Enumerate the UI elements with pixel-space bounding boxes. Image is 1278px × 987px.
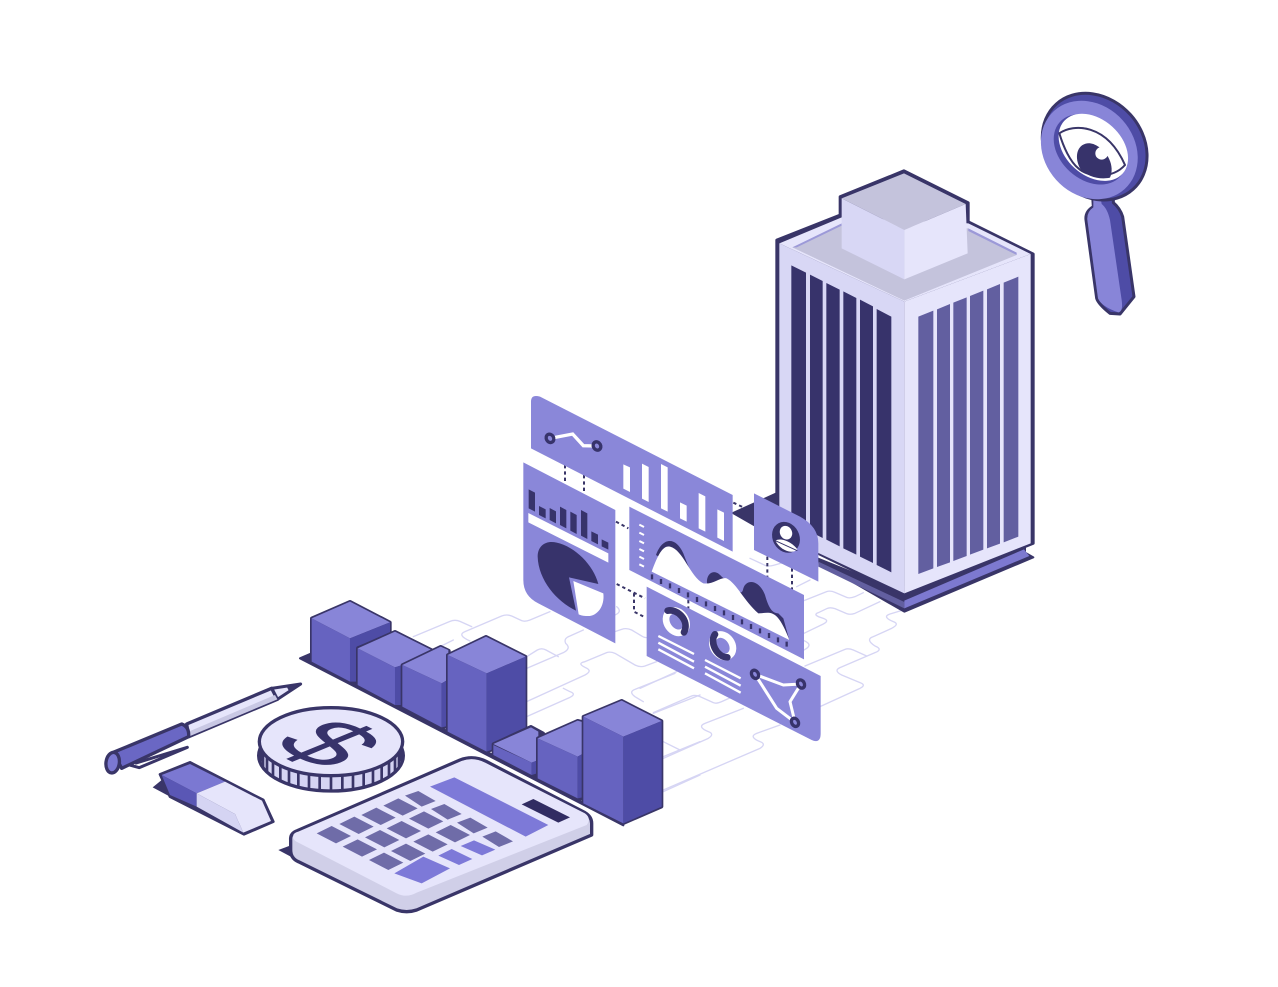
icon: user avatar — [767, 517, 805, 558]
network triangle — [750, 669, 806, 728]
data dashboard panels — [523, 396, 821, 741]
pen tip — [272, 684, 301, 699]
calculator shadow — [278, 845, 303, 863]
block 5 — [493, 727, 543, 775]
donut chart 1 — [662, 606, 691, 637]
building outline — [777, 171, 1033, 595]
building roof — [779, 217, 1031, 302]
building left wall — [779, 243, 904, 593]
block 3 — [402, 647, 449, 727]
calculator body — [291, 758, 592, 912]
panel: left stats and pie — [523, 462, 615, 643]
block 6 — [538, 721, 583, 798]
dollar sign: $ — [246, 707, 412, 780]
solar strip — [522, 799, 570, 823]
panel: profile card — [754, 493, 818, 582]
white strip — [528, 513, 608, 563]
bar chart: dark bars — [529, 489, 608, 550]
dollar coin — [246, 707, 412, 791]
block 4 — [448, 637, 526, 752]
pen — [105, 684, 301, 774]
background circuit lines — [393, 558, 903, 792]
calculator — [278, 758, 592, 912]
donut chart 2 — [708, 630, 737, 661]
panel: middle area chart — [629, 507, 804, 659]
pie chart — [538, 542, 604, 616]
bar blocks — [300, 602, 662, 825]
pen body — [187, 688, 277, 737]
dashed connectors — [565, 465, 792, 618]
building base — [733, 493, 1033, 612]
bar chart: white bars — [623, 464, 724, 541]
block 2 — [358, 632, 432, 705]
pen grip — [105, 724, 189, 774]
block 7 — [583, 701, 662, 823]
ground shadow — [300, 653, 623, 825]
calculator face — [293, 759, 589, 896]
block 1 — [312, 602, 390, 683]
building right wall — [904, 254, 1031, 593]
magnifier ring — [1021, 72, 1169, 221]
magnifier handle — [1086, 197, 1134, 314]
keypad — [317, 791, 513, 883]
coin edge — [259, 720, 403, 791]
area chart — [652, 541, 789, 640]
line chart: small trend — [545, 433, 602, 452]
office building — [733, 171, 1033, 612]
eraser — [153, 762, 273, 834]
text lines — [658, 636, 741, 693]
eye — [1059, 128, 1125, 178]
panel: bottom donuts and network — [647, 587, 821, 741]
calculator screen — [430, 777, 548, 837]
pen clip — [123, 747, 187, 768]
magnifying glass — [1021, 72, 1169, 314]
coin face — [259, 708, 403, 776]
axis ticks bottom — [652, 574, 787, 647]
axis ticks left — [639, 525, 644, 567]
rooftop cube — [842, 173, 968, 279]
panel: top bar chart — [531, 396, 733, 552]
